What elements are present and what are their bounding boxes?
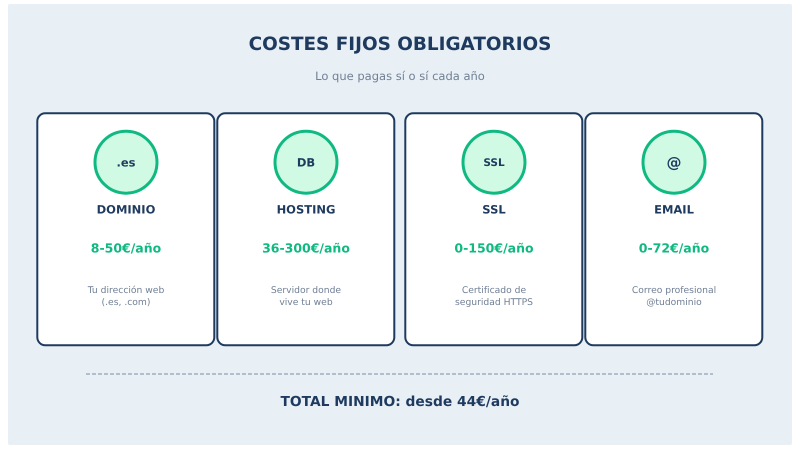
heading: dominio: DOMINIO <box>97 202 156 216</box>
icon: email <box>643 131 705 193</box>
icon: ssl: SSL <box>483 157 505 169</box>
icon: dominio: .es <box>116 156 136 170</box>
icon: ssl <box>463 131 525 193</box>
description: dominio: Tu dirección web <box>88 285 164 296</box>
icon: email: @ <box>666 154 682 172</box>
panel: dominio <box>37 113 214 345</box>
heading: email: EMAIL <box>654 202 695 216</box>
total: TOTAL MINIMO: desde 44€/año <box>280 394 520 410</box>
price: hosting: 36-300€/año <box>262 240 350 255</box>
price: email: 0-72€/año <box>639 240 710 255</box>
icon: hosting <box>275 131 337 193</box>
price: ssl: 0-150€/año <box>454 240 534 255</box>
subtitle: Lo que pagas sí o sí cada año <box>315 69 485 83</box>
description: ssl: seguridad HTTPS <box>455 297 533 308</box>
title: COSTES FIJOS OBLIGATORIOS <box>249 34 551 55</box>
description: email: Correo profesional <box>632 285 716 296</box>
description: dominio: (.es, .com) <box>102 297 150 308</box>
price: dominio: 8-50€/año <box>91 240 162 255</box>
panel: ssl <box>405 113 582 345</box>
description: hosting: vive tu web <box>279 297 333 308</box>
panel: hosting <box>217 113 394 345</box>
description: hosting: Servidor donde <box>271 285 341 296</box>
icon: hosting: DB <box>297 156 315 170</box>
heading: ssl: SSL <box>482 202 506 216</box>
panel: email <box>585 113 762 345</box>
icon: dominio <box>95 131 157 193</box>
description: email: @tudominio <box>646 297 702 308</box>
description: ssl: Certificado de <box>462 285 526 296</box>
heading: hosting: HOSTING <box>277 202 335 216</box>
